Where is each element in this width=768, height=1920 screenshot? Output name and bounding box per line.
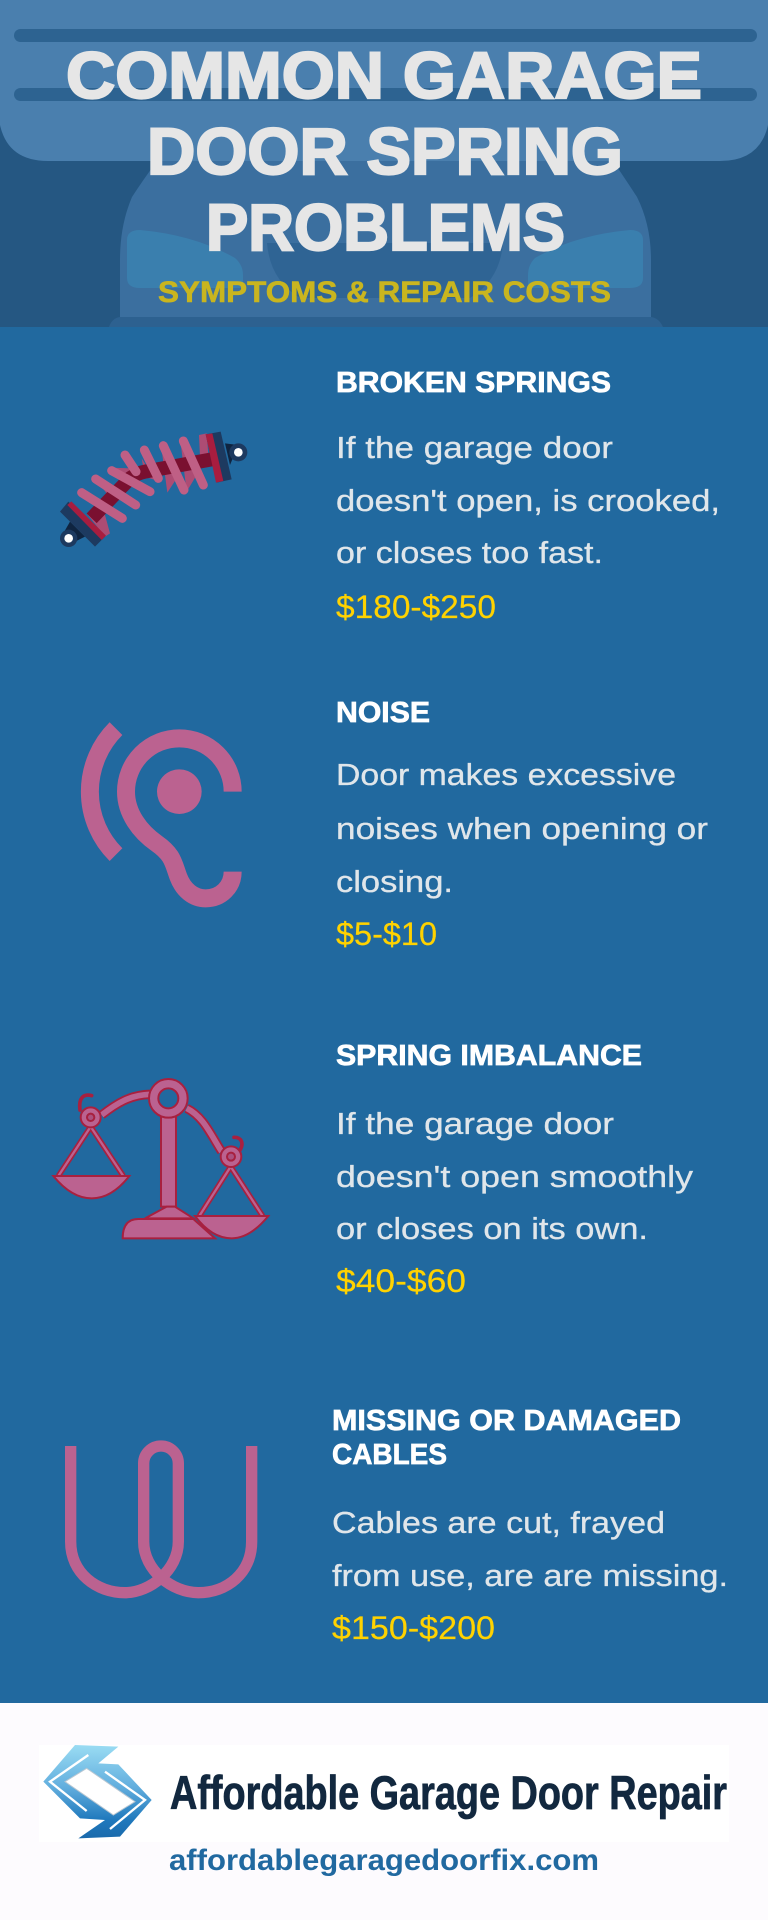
panel: spring imbalance xyxy=(53,1040,694,1299)
main blue background xyxy=(0,327,768,1703)
panel: footer xyxy=(0,1703,768,1920)
price: spring imbalance: $40-$60 xyxy=(336,1263,466,1299)
subtitle: SYMPTOMS & REPAIR COSTS xyxy=(158,276,611,309)
description: spring imbalance: doesn't open smoothly xyxy=(336,1159,694,1194)
heading: missing or damaged cables: MISSING OR DAMAGED xyxy=(332,1405,681,1437)
description: noise xyxy=(336,757,708,899)
description: cables xyxy=(332,1505,728,1593)
website url: affordablegaragedoorfix.com xyxy=(169,1844,599,1877)
description: broken springs xyxy=(336,430,720,570)
title xyxy=(66,38,702,264)
icon: spring xyxy=(60,432,247,547)
icon: company logo xyxy=(43,1745,152,1838)
panel: noise xyxy=(90,697,708,952)
description: spring imbalance: If the garage door xyxy=(336,1106,614,1141)
panel: missing or damaged cables xyxy=(71,1405,728,1646)
panel: broken springs xyxy=(60,367,720,625)
description: noise: Door makes excessive xyxy=(336,757,676,792)
title: PROBLEMS xyxy=(206,190,565,264)
description: broken springs: doesn't open, is crooked, xyxy=(336,483,720,518)
description: broken springs: or closes too fast. xyxy=(336,535,603,570)
description: noise: noises when opening or xyxy=(336,811,708,846)
description: spring imbalance: or closes on its own. xyxy=(336,1211,648,1246)
heading: missing or damaged cables xyxy=(332,1405,681,1471)
heading: missing or damaged cables: CABLES xyxy=(332,1439,447,1471)
description: noise: closing. xyxy=(336,864,453,899)
heading: spring imbalance: SPRING IMBALANCE xyxy=(336,1040,642,1072)
icon: cable xyxy=(71,1446,252,1593)
title: COMMON GARAGE xyxy=(66,38,702,112)
description: spring imbalance xyxy=(336,1106,694,1246)
price: noise: $5-$10 xyxy=(336,916,437,952)
description: broken springs: If the garage door xyxy=(336,430,613,465)
description: cables: from use, are are missing. xyxy=(332,1558,728,1593)
title: DOOR SPRING xyxy=(147,114,623,188)
price: cables: $150-$200 xyxy=(332,1610,495,1646)
heading: broken springs: BROKEN SPRINGS xyxy=(336,367,611,399)
icon: balance scale xyxy=(53,1079,268,1238)
panel: header garage illustration xyxy=(0,0,768,327)
description: cables: Cables are cut, frayed xyxy=(332,1505,665,1540)
heading: noise: NOISE xyxy=(336,697,430,729)
icon: ear xyxy=(90,729,233,898)
price: broken springs: $180-$250 xyxy=(336,589,496,625)
